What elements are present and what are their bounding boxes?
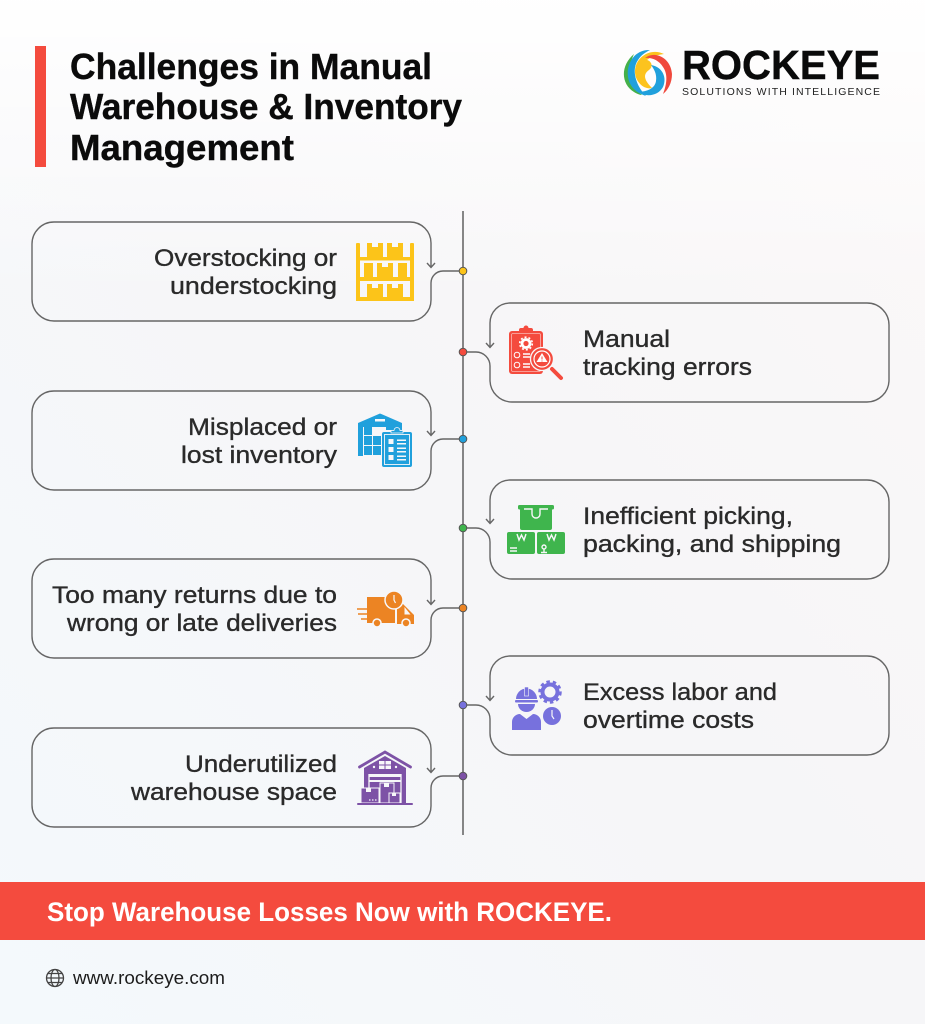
heading: Manual	[583, 326, 670, 353]
icon: late delivery truck	[357, 591, 414, 627]
title: Management	[70, 127, 294, 168]
heading: understocking	[170, 273, 337, 300]
logo swirl mark	[624, 50, 672, 96]
heading: lost inventory	[181, 442, 337, 469]
card: returns	[32, 559, 467, 658]
heading: Excess labor and	[583, 679, 777, 706]
heading	[130, 751, 337, 806]
heading	[52, 582, 337, 637]
footer website	[46, 968, 225, 988]
node	[459, 524, 467, 532]
title accent bar	[35, 46, 46, 167]
card: picking packing shipping	[459, 480, 889, 579]
website url: www.rockeye.com	[72, 968, 225, 988]
card: labor costs	[459, 656, 889, 755]
title	[70, 46, 462, 168]
icon: warehouse building	[357, 752, 413, 805]
card: overstocking	[32, 222, 467, 321]
icon: warehouse with clipboard	[358, 414, 412, 467]
card: manual tracking	[459, 303, 889, 402]
heading	[583, 679, 777, 734]
call to action banner	[0, 882, 925, 940]
icon: clipboard with magnifier	[509, 326, 561, 378]
icon: globe	[46, 970, 64, 986]
card: misplaced	[32, 391, 467, 490]
icon: worker with gear and clock	[512, 682, 561, 730]
timeline spine	[462, 211, 464, 835]
heading: tracking errors	[583, 354, 752, 381]
node	[459, 701, 467, 709]
node	[459, 604, 467, 612]
card: underutilized space	[32, 728, 467, 827]
node	[459, 348, 467, 356]
node	[459, 772, 467, 780]
heading: Inefficient picking,	[583, 503, 793, 530]
title: Challenges in Manual	[70, 46, 432, 87]
logo: Rockeye	[624, 42, 880, 98]
heading: Overstocking or	[154, 245, 337, 272]
banner text: Stop Warehouse Losses Now with ROCKEYE.	[47, 897, 612, 927]
icon: stacked boxes	[507, 505, 565, 554]
icon: shelves	[356, 243, 414, 301]
heading	[154, 245, 337, 300]
heading	[583, 503, 841, 558]
heading: overtime costs	[583, 707, 754, 734]
heading: Too many returns due to	[52, 582, 337, 609]
node	[459, 435, 467, 443]
node	[459, 267, 467, 275]
heading: wrong or late deliveries	[66, 610, 337, 637]
heading: Misplaced or	[188, 414, 337, 441]
logo tagline: SOLUTIONS WITH INTELLIGENCE	[682, 86, 880, 98]
heading	[583, 326, 752, 381]
logo wordmark: ROCKEYE	[682, 42, 880, 88]
heading: packing, and shipping	[583, 531, 841, 558]
heading: Underutilized	[185, 751, 337, 778]
heading: warehouse space	[130, 779, 337, 806]
title: Warehouse & Inventory	[70, 86, 462, 127]
heading	[181, 414, 337, 469]
